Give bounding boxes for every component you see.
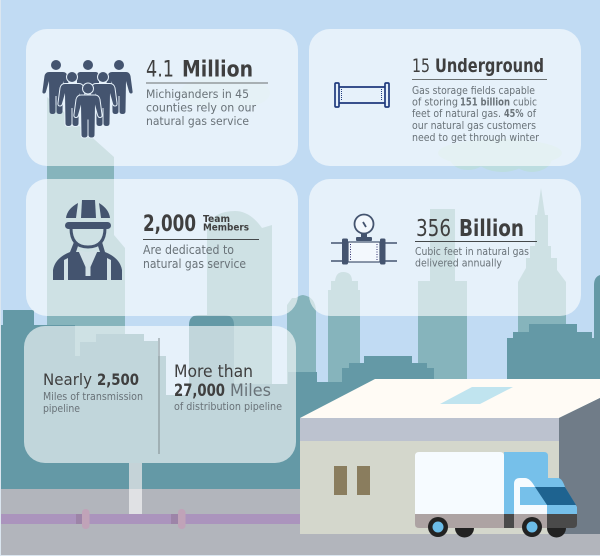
text: 15 Underground: need to get through winter — [412, 132, 540, 144]
clouds — [180, 76, 562, 172]
warehouse building — [300, 379, 600, 534]
panel: delivered gas card — [309, 179, 581, 316]
text: 356 Billion — [415, 216, 537, 270]
delivery truck — [415, 452, 577, 538]
text: 15 Underground: of — [527, 108, 536, 120]
text: 4.1 Million — [146, 58, 268, 128]
text: 2,000 Team Members — [143, 212, 259, 271]
text: nearly 2,500 miles: Miles of transmission — [43, 391, 143, 403]
text: 356 Billion: 356 — [416, 216, 451, 242]
text: more than 27,000 miles: of distribution pipeline — [174, 401, 282, 413]
text: 2,000 Team Members: Are dedicated to — [143, 243, 234, 257]
sign post — [129, 463, 142, 514]
skyline: dark buildings — [1, 275, 600, 490]
text: 356 Billion: delivered annually — [415, 256, 502, 270]
text: 4.1 Million: counties rely on our — [146, 100, 256, 114]
text: 4.1 Million: 4.1 — [146, 58, 174, 82]
text: 4.1 Million: Million — [182, 58, 253, 82]
text: 4.1 Million: natural gas service — [146, 114, 249, 128]
text: nearly 2,500 miles: Nearly — [43, 370, 92, 389]
skyline: light buildings — [47, 97, 566, 400]
text: 4.1 Million: Michiganders in 45 — [146, 87, 249, 101]
pipeline — [1, 509, 300, 529]
text: 15 Underground: cubic — [513, 96, 537, 108]
text: 2,000 Team Members: Team — [203, 214, 230, 225]
panel: pipeline miles card — [24, 326, 296, 463]
text: more than 27,000 miles: More than — [174, 362, 253, 382]
text: nearly 2,500 miles — [43, 370, 143, 415]
text: 15 Underground: 15 — [412, 55, 430, 77]
panel: team members card — [26, 179, 298, 316]
text: 15 Underground: Underground — [435, 55, 544, 77]
panel: underground storage card — [309, 29, 581, 166]
text: 15 Underground: feet of natural gas. — [412, 108, 501, 120]
icon: construction worker — [53, 200, 122, 280]
text: 356 Billion: Cubic feet in natural gas — [415, 245, 529, 258]
text: more than 27,000 miles: Miles — [230, 381, 271, 401]
icon: pipe section — [335, 83, 389, 107]
text: 15 Underground: 151 billion — [460, 96, 510, 108]
text: 2,000 Team Members: natural gas service — [143, 257, 246, 271]
panel: residents card — [26, 29, 298, 166]
icon: group of people — [42, 60, 133, 138]
icon: pressure gauge on pipe — [331, 214, 397, 264]
divider — [158, 338, 160, 454]
text: 15 Underground: Gas storage fields capable — [412, 85, 535, 97]
text: 15 Underground — [412, 55, 547, 144]
text: 15 Underground: of storing — [412, 96, 458, 108]
text: nearly 2,500 miles: pipeline — [43, 403, 80, 415]
text: nearly 2,500 miles: 2,500 — [97, 370, 139, 389]
text: 2,000 Team Members: Members — [203, 222, 249, 234]
text: 356 Billion: Billion — [459, 216, 524, 242]
text: more than 27,000 miles: 27,000 — [174, 381, 225, 401]
ground — [1, 489, 600, 555]
text: 15 Underground: 45% — [504, 108, 524, 120]
text: 15 Underground: our natural gas customers — [412, 120, 536, 132]
text: more than 27,000 miles — [174, 362, 282, 413]
text: 2,000 Team Members: 2,000 — [143, 212, 196, 237]
